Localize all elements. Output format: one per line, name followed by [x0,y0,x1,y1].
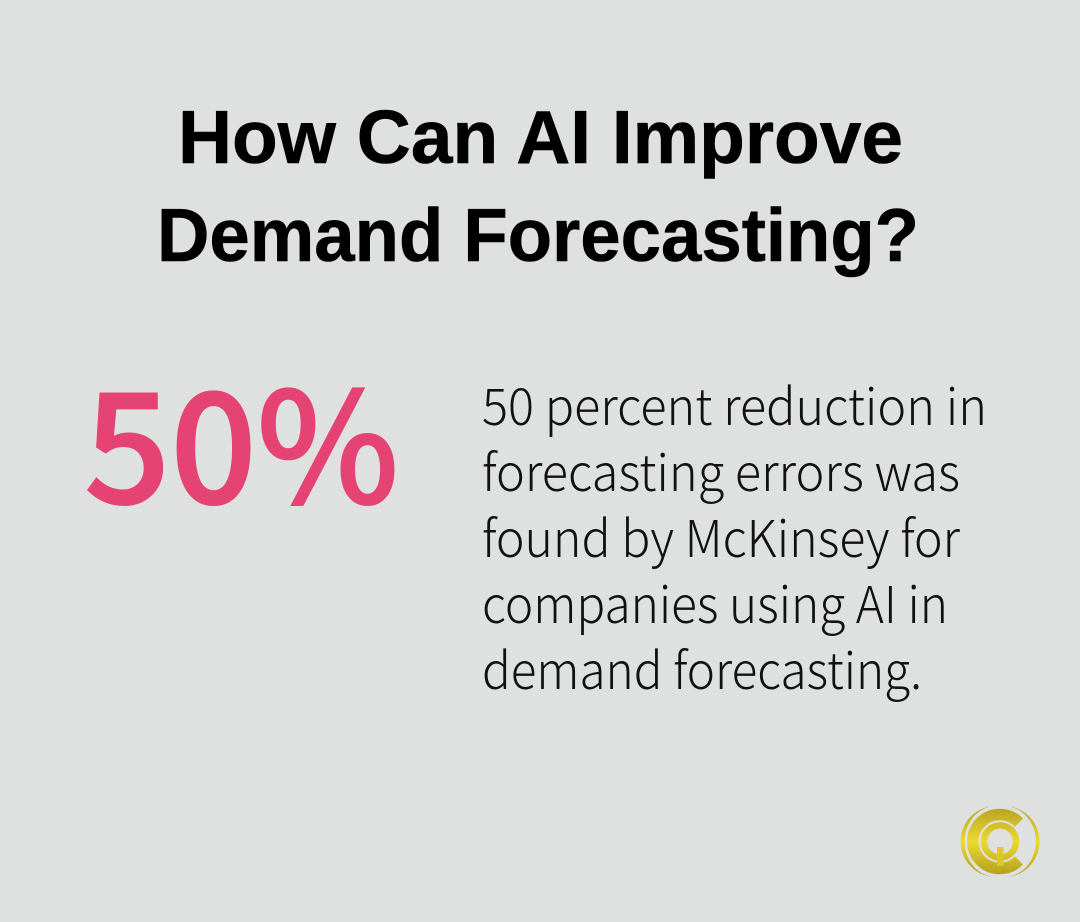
description text: found by McKinsey for [482,498,961,572]
description text: 50 percent reduction in [482,366,987,440]
description text: companies using AI in [482,564,948,638]
title: Demand Forecasting? [157,193,919,277]
title: How Can AI Improve [178,95,903,179]
description text: forecasting errors was [482,432,960,506]
icon: gold CQ logo [960,806,1040,877]
title [157,95,919,277]
description text: demand forecasting. [482,630,922,704]
big statistic: 50%: 50% [84,327,399,548]
description text [482,366,987,704]
